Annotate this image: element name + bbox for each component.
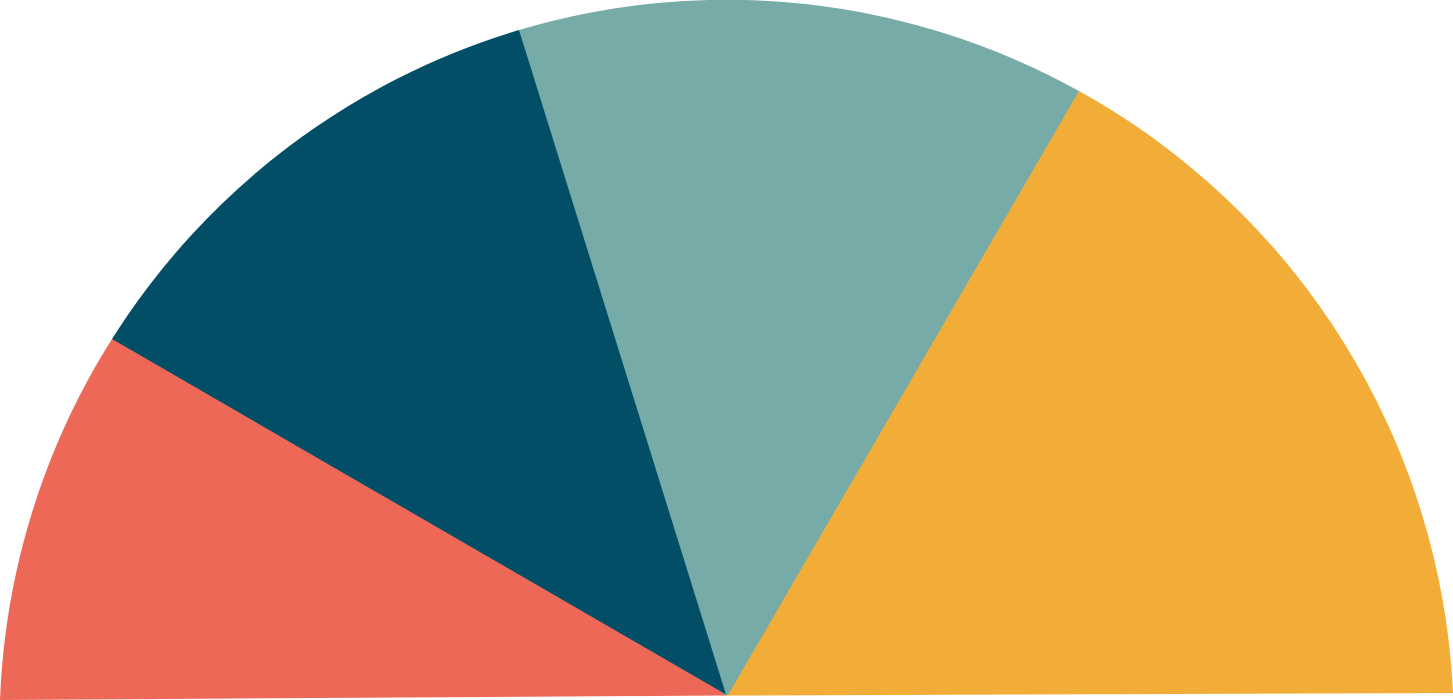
segment: light teal bbox=[519, 0, 1079, 695]
segment: amber bbox=[720, 91, 1453, 696]
segment: dark teal bbox=[112, 30, 726, 694]
segment: coral bbox=[0, 339, 726, 700]
